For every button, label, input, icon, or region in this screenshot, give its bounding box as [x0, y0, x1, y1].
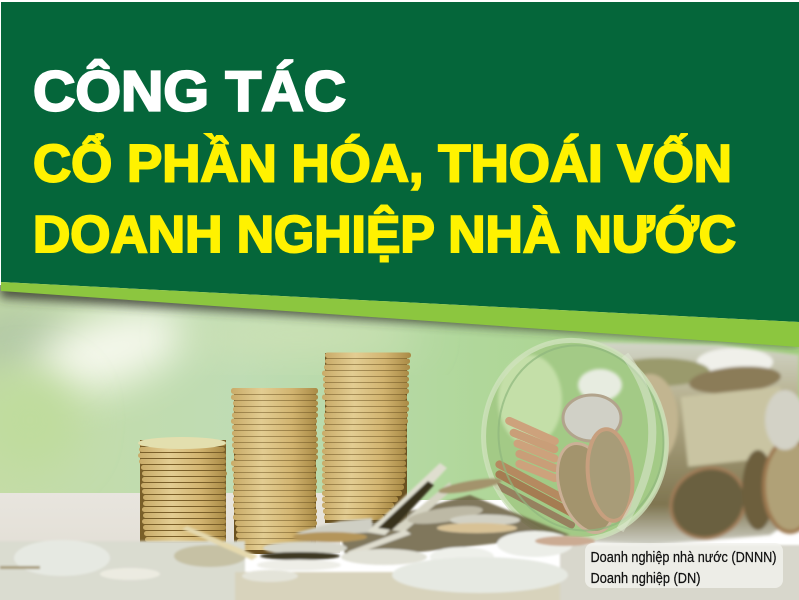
coins in jar — [493, 395, 637, 540]
loose coins on the table — [0, 463, 799, 600]
shadow under band — [0, 280, 799, 345]
title line 1: CÔNG TÁC — [33, 58, 346, 122]
title line 3: DOANH NGHIỆP NHÀ NƯỚC — [33, 205, 736, 263]
coin stack: middle — [231, 388, 318, 554]
jar mouth interior — [486, 343, 666, 537]
coin stack: right — [322, 352, 411, 523]
dark shadows among coins — [340, 495, 570, 555]
title — [33, 58, 736, 263]
coin stack: left — [138, 437, 227, 546]
jar rim — [481, 338, 669, 540]
legend line 2: Doanh nghiệp (DN) — [590, 570, 700, 587]
header panel — [1, 2, 799, 322]
blurred green backdrop — [0, 285, 799, 553]
title line 2: CỔ PHẦN HÓA, THOÁI VỐN — [33, 134, 732, 194]
light green diagonal band — [1, 282, 799, 347]
jar body — [592, 340, 799, 544]
glass jar — [481, 338, 799, 544]
silver arc — [295, 518, 372, 536]
photo: coins and glass jar — [0, 280, 799, 600]
legend box — [585, 543, 783, 588]
